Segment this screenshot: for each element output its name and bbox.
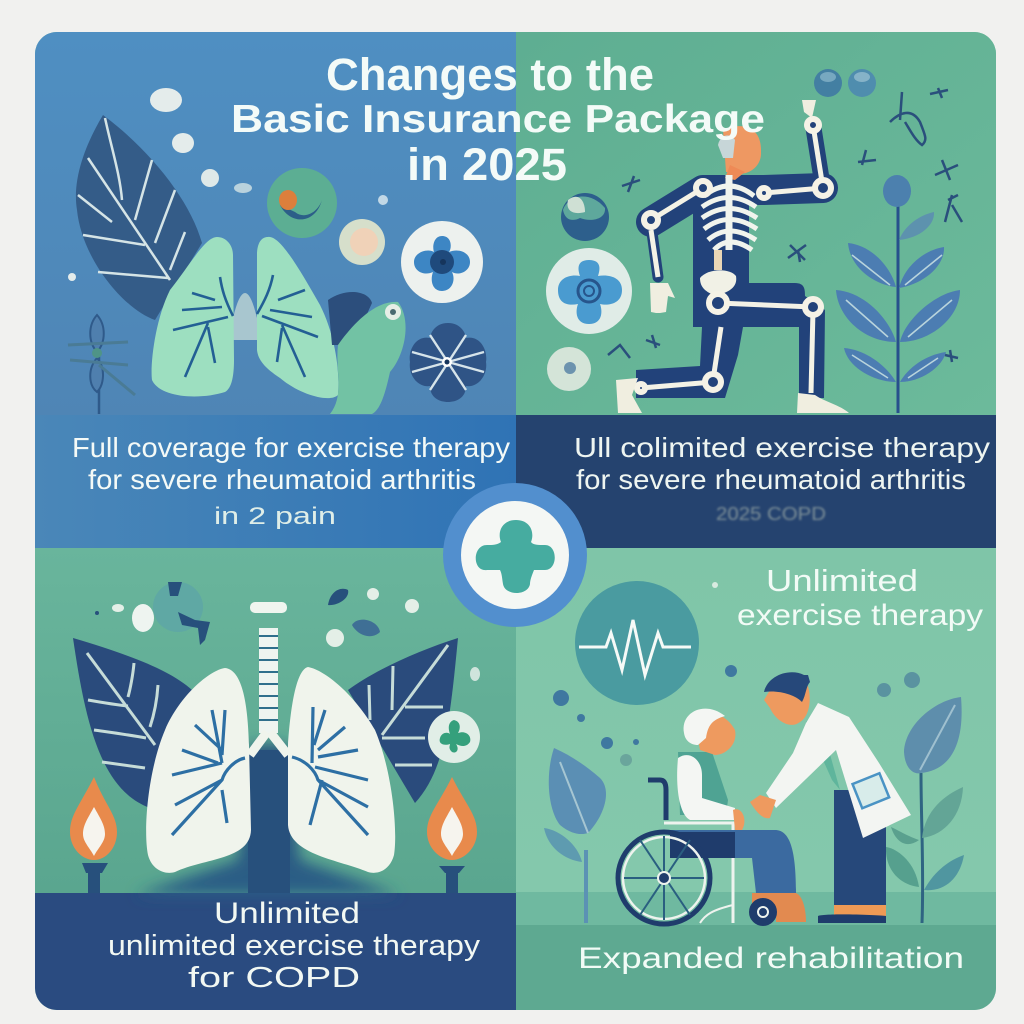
icons: floating circles, top left [68, 88, 388, 281]
bones [641, 125, 823, 393]
panel: bottom-right background [516, 548, 996, 892]
icons: small dark marks, top right [608, 88, 962, 362]
band: top-right caption background [516, 415, 996, 548]
icon: small ring circle [547, 347, 591, 391]
figure body [636, 178, 825, 398]
icon: white circle with blue knot [546, 248, 632, 334]
icon: thin flower, top left [68, 315, 135, 414]
icon: centre medical cross badge [443, 483, 587, 627]
hands and shoes [616, 100, 849, 413]
band: top-left caption background [35, 415, 516, 548]
icon: blue-green plant, bottom right right side [886, 697, 964, 923]
band: bottom-right ground [516, 892, 996, 925]
caption: unlimited exercise therapy for COPD: for COPD [188, 962, 360, 994]
icons: scattered shapes, bottom right [553, 582, 920, 766]
icon: dark leaves, bottom left [73, 638, 458, 808]
caption: unlimited exercise therapy: Ull colimited exercise therapy [574, 432, 990, 463]
caption: full coverage for exercise therapy: Full coverage for exercise therapy [72, 432, 510, 463]
title: in 2025 [407, 139, 567, 190]
caption: unlimited exercise therapy for COPD: Unlimited [214, 897, 360, 930]
panel: top-left background [35, 32, 516, 416]
band: bottom-right caption background [516, 925, 996, 1010]
icon: dark flower, top left [410, 323, 486, 402]
icons: two blue spheres, top right [814, 69, 876, 97]
panel: bottom-left background [35, 548, 516, 893]
caption: expanded rehabilitation: Expanded rehabilitation [578, 942, 964, 975]
band: bottom-left caption background [35, 893, 516, 1010]
icon: large dark leaf, top left [76, 115, 202, 320]
joints [637, 119, 831, 392]
icon: sphere, top right [561, 193, 609, 241]
icon: green leaves beside lungs [328, 292, 406, 414]
icons: scattered shapes, bottom left [95, 582, 480, 681]
dark shape behind lungs [135, 745, 400, 895]
caption: full coverage for exercise therapy: for severe rheumatoid arthritis [88, 464, 476, 495]
ribcage [702, 175, 757, 270]
caption: unlimited exercise therapy: 2025 COPD [716, 504, 826, 524]
icon: heartbeat circle [575, 581, 699, 705]
icon: flame candle, left [70, 777, 117, 893]
icon: white lungs with trachea [146, 602, 395, 893]
icon: flame candle, right [427, 777, 477, 893]
caption: full coverage for exercise therapy [72, 432, 510, 530]
icon: blue plant, top right [836, 175, 960, 413]
caption: unlimited exercise therapy: for severe rheumatoid arthritis [576, 464, 966, 495]
illustration: patient in wheelchair with doctor [618, 672, 911, 924]
caption: unlimited exercise therapy for COPD [108, 897, 481, 994]
title: Basic Insurance Package [231, 98, 765, 141]
icon: blue leaf, bottom right left side [544, 748, 606, 923]
caption: unlimited exercise therapy, bottom right [737, 563, 983, 632]
title [231, 49, 765, 190]
doctor [750, 672, 911, 923]
caption: unlimited exercise therapy, bottom right: Unlimited [766, 563, 918, 598]
pelvis [700, 270, 736, 296]
head [718, 126, 761, 180]
caption: unlimited exercise therapy for COPD: unlimited exercise therapy [108, 930, 481, 962]
patient [670, 709, 806, 922]
panel: top-right background [658, 32, 996, 415]
title: Changes to the [326, 49, 654, 100]
icon: skeleton figure exercising [616, 100, 849, 413]
icon: clover circle [428, 711, 480, 763]
icon: green lungs, top left [152, 237, 338, 398]
icon: white circle with medical cross, top left [401, 221, 483, 303]
wheel [618, 832, 775, 924]
wheelchair [648, 780, 733, 923]
caption: unlimited exercise therapy [574, 432, 990, 524]
caption: full coverage for exercise therapy: in 2 pain [214, 503, 336, 530]
caption: unlimited exercise therapy, bottom right: exercise therapy [737, 599, 983, 632]
